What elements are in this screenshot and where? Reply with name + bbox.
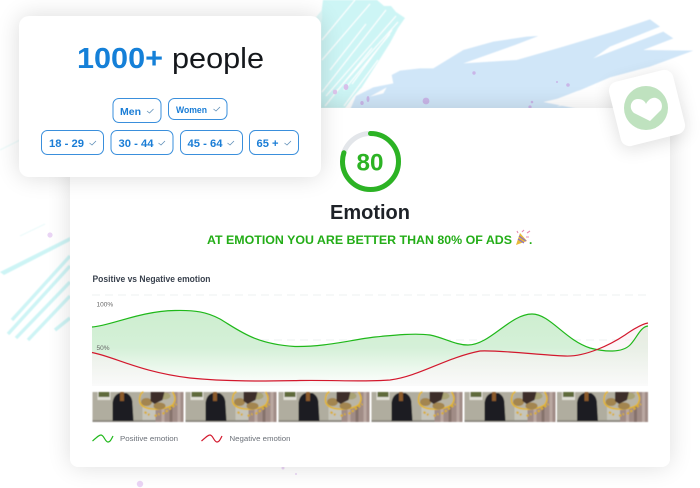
tag: Men <box>113 98 161 122</box>
emotion score gauge <box>342 134 398 190</box>
subheading: score statement: . <box>529 233 532 247</box>
tag: Women <box>168 98 227 120</box>
chart title: Positive vs Negative emotion <box>92 274 210 284</box>
blue brush stroke top right <box>350 19 693 110</box>
icon: heart badge <box>607 68 687 151</box>
tag: 18 - 29: 18 - 29 <box>49 138 84 150</box>
tag: Men: Men <box>120 106 141 118</box>
tag: 45 - 64: 45 - 64 <box>188 138 223 150</box>
axis label 100%: 100% <box>96 302 113 308</box>
axis label 50%: 50% <box>96 345 110 352</box>
legend <box>92 434 290 443</box>
gauge value: 80 <box>356 150 384 176</box>
main card <box>70 108 670 467</box>
tag: Women: Women <box>176 105 207 116</box>
negative emotion area <box>92 323 648 386</box>
subheading: score statement: AT EMOTION YOU ARE BETTER THAN 80% OF ADS <box>207 233 512 247</box>
audience headline: people <box>172 43 264 75</box>
audience headline: 1000+ <box>77 43 163 75</box>
heading: Emotion: Emotion <box>330 202 410 224</box>
paint splatter dots <box>47 71 570 487</box>
cyan brush stroke top <box>297 0 405 108</box>
tag: 65 + <box>250 130 298 154</box>
icon: party popper <box>516 230 530 245</box>
tag: 18 - 29 <box>42 130 104 154</box>
legend: negative emotion <box>202 434 290 443</box>
emotion area chart <box>92 295 648 386</box>
tag: 30 - 44: 30 - 44 <box>118 138 154 150</box>
positive emotion line <box>92 310 648 351</box>
negative emotion line <box>92 323 648 381</box>
legend: negative emotion: Negative emotion <box>230 434 290 443</box>
cyan brush stroke left <box>0 140 70 340</box>
tag: 65 +: 65 + <box>256 138 278 150</box>
legend: positive emotion: Positive emotion <box>120 434 178 443</box>
tag: 30 - 44 <box>111 130 173 154</box>
tag: 45 - 64 <box>180 130 242 154</box>
panel: audience card <box>19 16 321 177</box>
video frame strip <box>92 392 648 422</box>
legend: positive emotion <box>92 434 178 443</box>
positive emotion area <box>92 310 648 386</box>
